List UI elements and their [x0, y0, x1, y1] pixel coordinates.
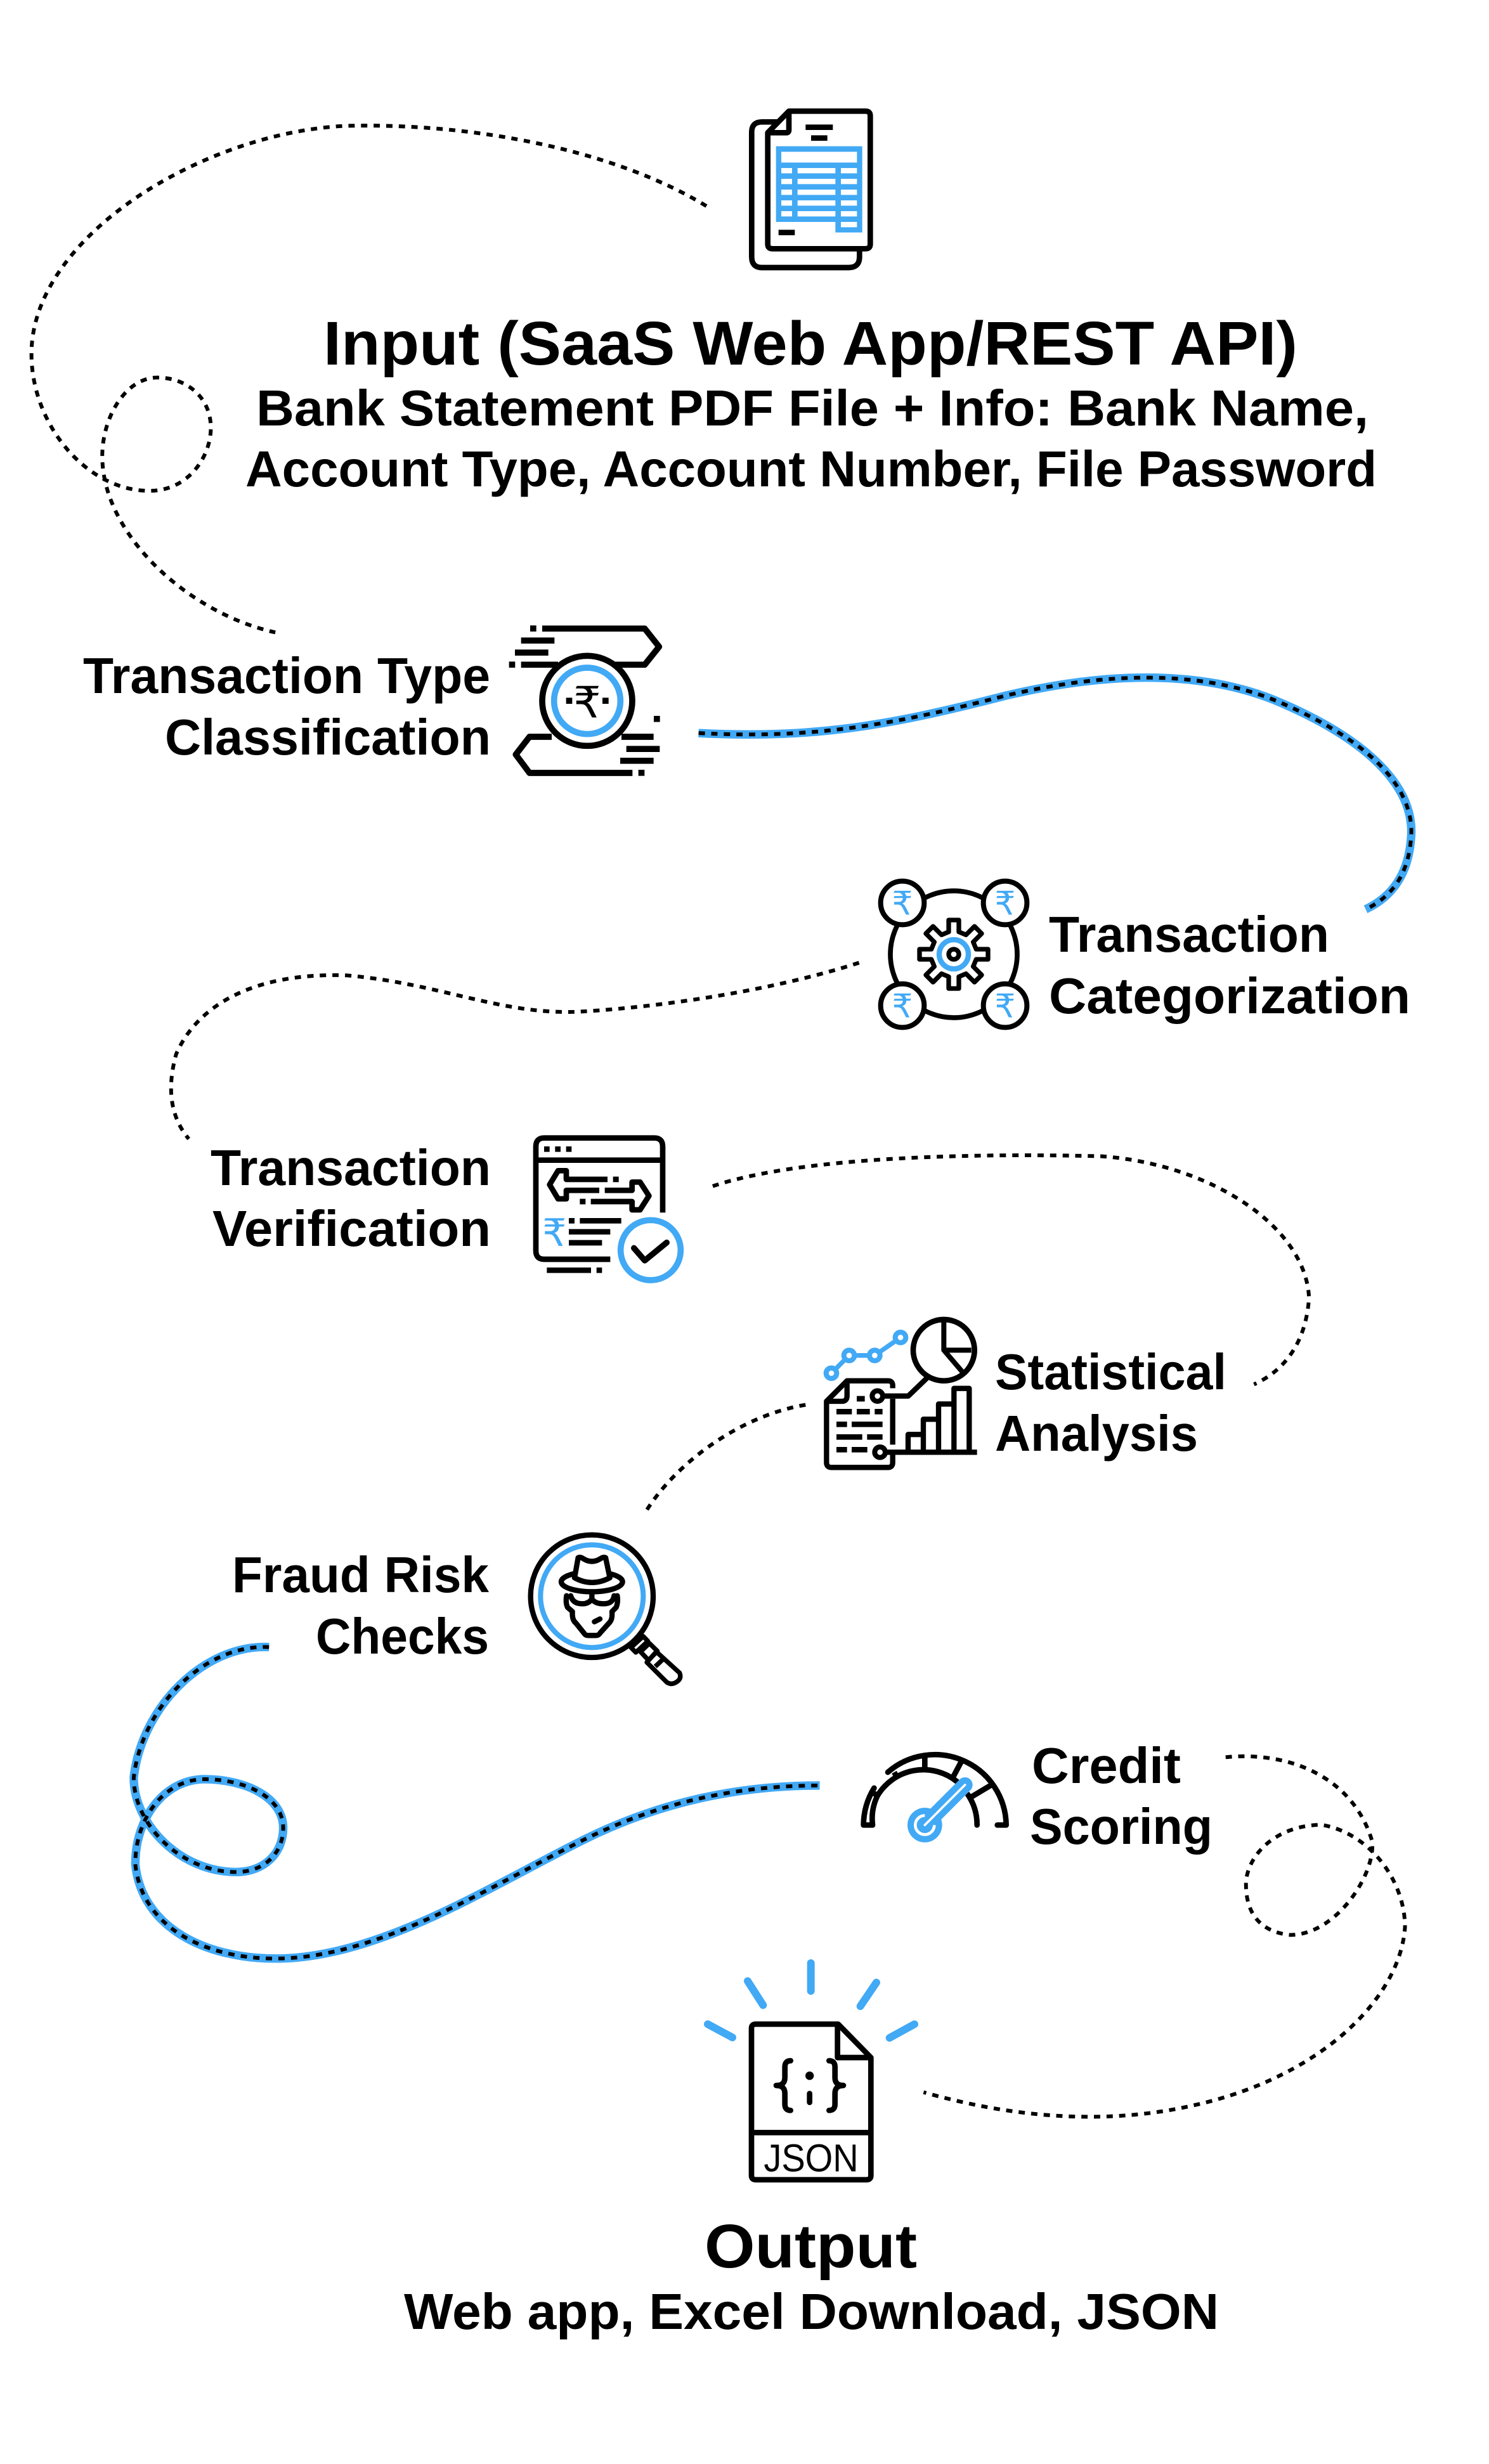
arrow: verification to statistical analysis [713, 1155, 1309, 1384]
input details line 1: Bank Statement PDF File + Info: Bank Name, [256, 380, 1369, 436]
label: transaction verification: Verification [212, 1200, 491, 1257]
label: credit scoring [1030, 1737, 1213, 1855]
icon: rupee exchange: ₹ [573, 678, 601, 728]
icon: categorization gear: ₹ [995, 885, 1015, 923]
icon: fraud magnifier with masked figure [531, 1535, 680, 1683]
icon: JSON output file: JSON [764, 2136, 859, 2179]
arrow: fraud risk checks to credit scoring [134, 1647, 820, 1959]
label: transaction categorization [1049, 906, 1410, 1024]
icon: JSON output file [708, 1963, 914, 2180]
icon: rupee exchange [509, 625, 660, 776]
label: statistical analysis: Statistical [995, 1344, 1226, 1400]
icon: categorization gear: ₹ [892, 885, 913, 923]
label: fraud risk checks [232, 1546, 489, 1664]
icon: categorization gear: ₹ [995, 988, 1015, 1026]
label: credit scoring: Credit [1032, 1737, 1181, 1794]
icon: categorization gear: ₹ [892, 988, 913, 1026]
label: statistical analysis: Analysis [995, 1405, 1198, 1462]
title: input: Input (SaaS Web App/REST API) [323, 309, 1297, 378]
icon: credit score gauge [864, 1754, 1006, 1843]
label: transaction verification [211, 1139, 491, 1257]
label: statistical analysis [995, 1344, 1226, 1462]
label: fraud risk checks: Fraud Risk [232, 1546, 489, 1603]
output formats: Web app, Excel Download, JSON [404, 2283, 1219, 2340]
title: output: Output [705, 2212, 917, 2281]
label: transaction type classification: Transaction Type [83, 647, 490, 704]
label: transaction categorization: Categorization [1049, 968, 1410, 1024]
input details line 2: Account Type, Account Number, File Password [245, 441, 1377, 497]
label: transaction type classification: Classification [165, 709, 491, 765]
arrow: statistical analysis to fraud risk checks [647, 1405, 805, 1510]
arrow: categorization to verification [171, 963, 859, 1139]
arrow: credit scoring to output [923, 1756, 1405, 2117]
label: transaction verification: Transaction [211, 1139, 491, 1196]
icon: statistical analysis charts [826, 1319, 977, 1467]
label: fraud risk checks: Checks [316, 1608, 489, 1664]
icon: verification window with check: ₹ [542, 1211, 566, 1255]
icon: categorization gear [881, 881, 1027, 1027]
icon: verification window with check [536, 1138, 680, 1280]
icon: bank statement document [751, 111, 870, 268]
arrow: input to transaction type classification [32, 126, 706, 632]
label: transaction categorization: Transaction [1049, 906, 1329, 963]
label: transaction type classification [83, 647, 491, 765]
arrow: classification to categorization [699, 678, 1412, 909]
label: credit scoring: Scoring [1030, 1798, 1213, 1855]
